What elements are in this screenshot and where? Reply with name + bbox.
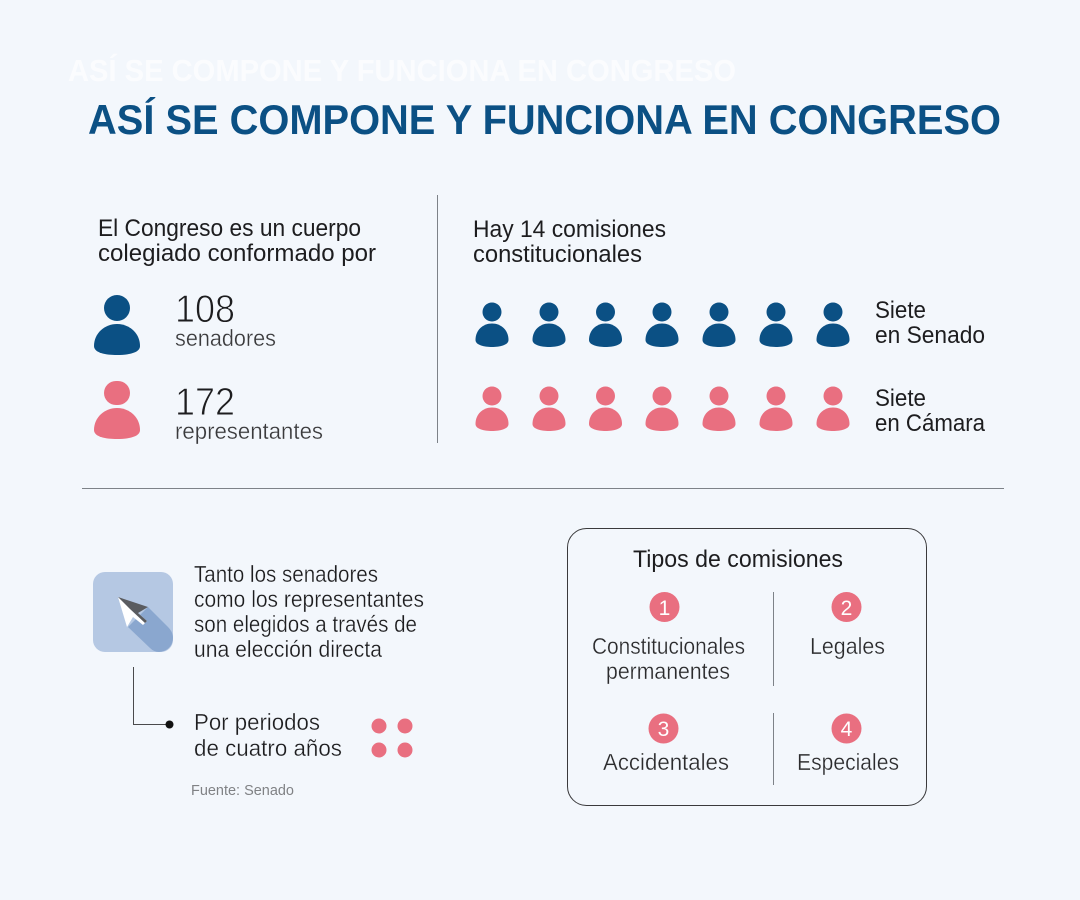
type 4	[797, 714, 899, 775]
intro text: El Congreso es un cuerpo	[98, 215, 361, 242]
type 1: 1	[659, 597, 670, 620]
term text	[194, 709, 342, 761]
intro text: colegiado conformado por	[98, 240, 376, 267]
connector arrow	[134, 667, 174, 728]
senators number: 108	[175, 288, 235, 331]
icon: four dots	[372, 718, 412, 758]
term text: de cuatro años	[194, 735, 342, 761]
election text: una elección directa	[194, 636, 382, 662]
representatives number: 172	[175, 381, 235, 424]
panel: types of commissions	[568, 528, 926, 806]
intro text	[98, 215, 376, 267]
label: seven in Chamber	[875, 385, 986, 437]
type 3	[603, 714, 729, 775]
type 4: 4	[841, 718, 853, 741]
label: seven in Chamber: en Cámara	[875, 410, 986, 437]
election text	[194, 561, 424, 662]
commissions heading: Hay 14 comisiones	[473, 216, 666, 243]
label: seven in Senate	[875, 297, 985, 349]
commissions heading: constitucionales	[473, 241, 642, 268]
type 4: Especiales	[797, 749, 899, 775]
type 2: Legales	[810, 633, 885, 659]
icons: seven representatives	[476, 386, 850, 431]
panel: composition of Congress	[94, 215, 376, 444]
type 1	[592, 592, 745, 684]
panel: constitutional commissions	[473, 216, 986, 437]
commissions heading	[473, 216, 666, 268]
icon: representative	[94, 381, 140, 439]
type 2	[810, 592, 885, 659]
type 3: Accidentales	[603, 749, 729, 775]
election text: son elegidos a través de	[194, 611, 417, 637]
type 1: permanentes	[606, 658, 730, 684]
title: ASÍ SE COMPONE Y FUNCIONA EN CONGRESO	[88, 96, 1001, 143]
panel: election	[93, 561, 424, 799]
source: Fuente: Senado	[191, 782, 294, 799]
representatives label: representantes	[175, 418, 323, 444]
senators label: senadores	[175, 325, 276, 351]
icons: seven senators	[476, 302, 850, 347]
ghost title: ASÍ SE COMPONE Y FUNCIONA EN CONGRESO	[68, 53, 736, 88]
label: seven in Senate: Siete	[875, 297, 926, 324]
type 2: 2	[841, 597, 852, 620]
term text: Por periodos	[194, 709, 320, 735]
type 3: 3	[658, 718, 669, 741]
icon: cursor	[93, 572, 173, 652]
election text: Tanto los senadores	[194, 561, 378, 587]
label: seven in Chamber: Siete	[875, 385, 926, 412]
label: seven in Senate: en Senado	[875, 322, 985, 349]
icon: senator	[94, 295, 140, 355]
type 1: Constitucionales	[592, 633, 745, 659]
panel heading: Tipos de comisiones	[633, 546, 843, 573]
election text: como los representantes	[194, 586, 424, 612]
